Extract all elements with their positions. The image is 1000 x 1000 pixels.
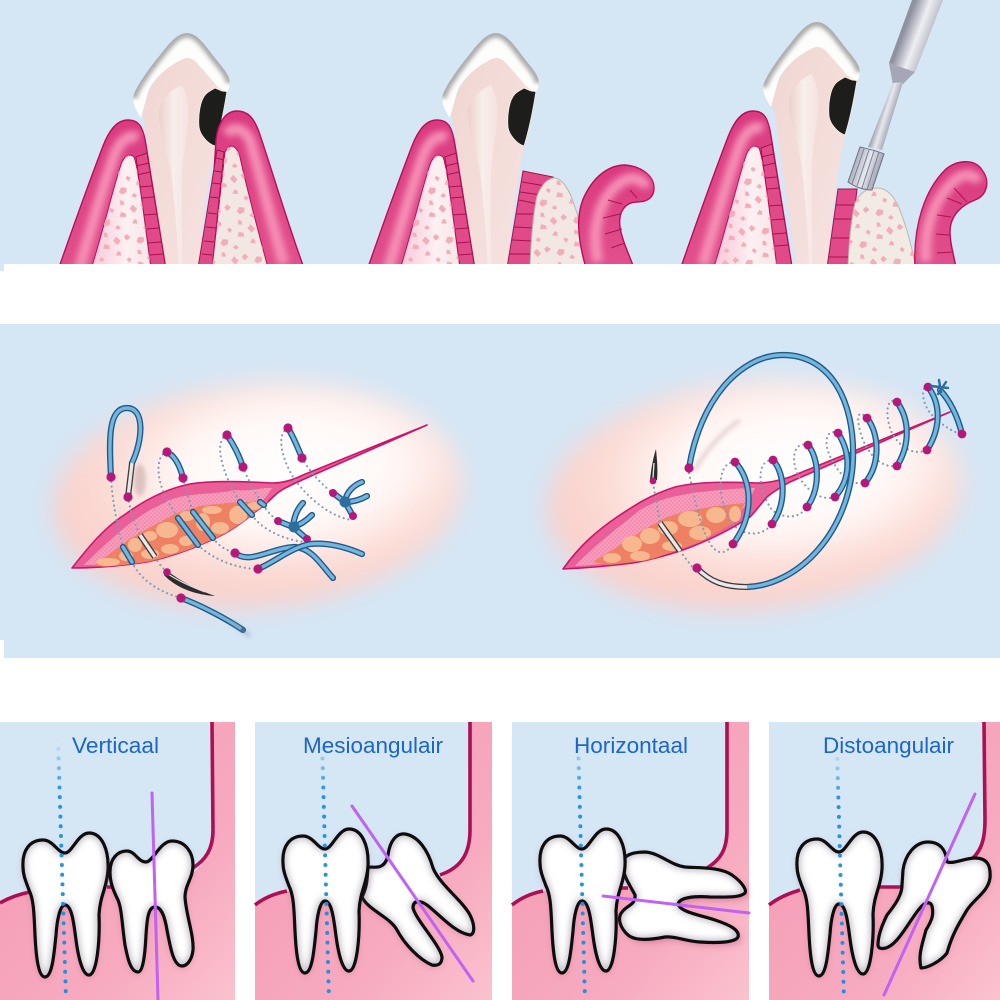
gum [512, 722, 749, 1000]
axis of wisdom tooth [884, 794, 975, 995]
axis of wisdom tooth [152, 793, 158, 1000]
gum flap, stage 3 [915, 162, 987, 268]
panel: top row background [0, 0, 1000, 271]
panel: periodontal stage 2 [365, 33, 654, 280]
panel: Verticaal [0, 722, 235, 1000]
panel: interrupted sutures [44, 366, 472, 636]
left gum and bone, stage 2 [368, 119, 475, 264]
wound right [563, 412, 950, 569]
stitches crossing wound left [123, 502, 264, 562]
skin glow left [44, 366, 472, 624]
icon: tooth with cavity, stage 1 [133, 33, 230, 280]
dotted suture paths left [111, 428, 353, 597]
axis of wisdom tooth [352, 806, 473, 981]
panel: continuous suture [538, 355, 972, 627]
needle tip left [163, 568, 215, 596]
left gum and bone, stage 1 [60, 119, 166, 264]
gum [769, 722, 1000, 1000]
heading: Horizontaal [574, 733, 688, 758]
second molar [283, 829, 368, 975]
shadow under big loop [695, 420, 740, 470]
wisdom tooth mesial tilt [362, 834, 474, 967]
heading: Verticaal [72, 733, 159, 758]
gum [0, 722, 235, 1000]
icon: tooth with cavity, stage 3 [763, 22, 860, 269]
needle tip right [650, 449, 657, 484]
panel: periodontal stage 3 [681, 22, 987, 269]
second molar [23, 833, 108, 979]
right gum and bone, stage 1 [198, 111, 304, 268]
row of continuous stitches [729, 380, 966, 548]
icon: tooth with cavity, stage 2 [442, 33, 539, 280]
loop suture with needle left [106, 408, 146, 502]
exposed ligament and bone, stage 3 [827, 188, 916, 268]
dotted suture paths right [653, 387, 962, 568]
panel: suturing background [0, 324, 1000, 658]
short stitches left [162, 423, 307, 483]
axis of wisdom tooth [603, 896, 749, 913]
heading: Mesioangulair [303, 733, 443, 758]
panel: Mesioangulair [255, 722, 492, 1000]
big suture loop with needle [684, 355, 853, 587]
gum [255, 722, 492, 1000]
stitch across wound right [660, 523, 680, 551]
dotted axis [322, 739, 329, 1000]
heading: Distoangulair [823, 733, 954, 758]
wound left [72, 425, 427, 568]
dotted axis [837, 749, 844, 1000]
left gum and bone, stage 3 [681, 111, 792, 267]
dotted axis [578, 739, 585, 1000]
exposed ligament and bone, stage 2 [507, 170, 584, 264]
panel: Horizontaal [512, 722, 749, 1000]
icon: dental instrument with rotary bur [848, 0, 943, 190]
skin glow right [538, 363, 972, 627]
gum flap, stage 2 [579, 165, 654, 268]
wisdom tooth vertical [110, 841, 193, 974]
loose thread end left [176, 593, 250, 636]
second molar [797, 832, 882, 978]
tied knot upper left panel [329, 482, 367, 520]
crossing suture strands left [230, 544, 362, 578]
panel: Distoangulair [769, 722, 1000, 1000]
second molar [540, 829, 625, 975]
dotted axis [58, 739, 66, 1000]
wisdom tooth distal tilt [878, 842, 990, 970]
panel: periodontal stage 1 [56, 33, 304, 280]
wisdom tooth horizontal [620, 852, 748, 945]
tied knot lower left panel [274, 503, 312, 543]
